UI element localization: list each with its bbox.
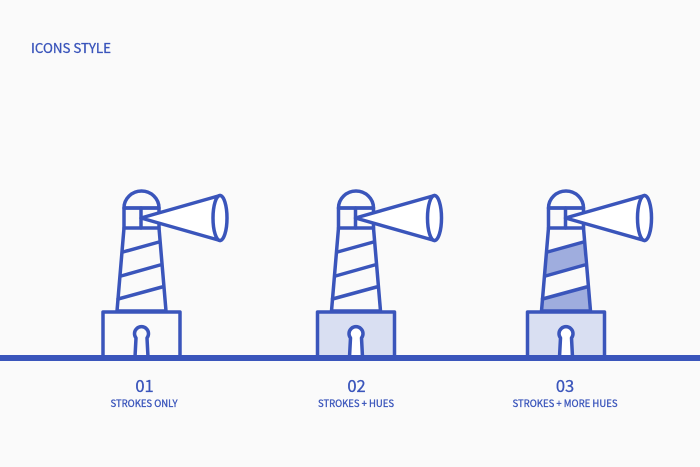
label 01: STROKES ONLY [110, 395, 178, 410]
lighthouse icon 01: strokes only [103, 191, 227, 357]
label 03 [512, 373, 618, 410]
ground line [0, 355, 700, 361]
label 02: 02 [347, 373, 366, 397]
title: ICONS STYLE [31, 37, 111, 57]
label 01: 01 [135, 373, 154, 397]
label 03: 03 [556, 373, 574, 397]
label 02: STROKES + HUES [318, 395, 394, 410]
label 02 [318, 373, 394, 410]
label 03: STROKES + MORE HUES [512, 395, 618, 410]
lighthouse icon 03: strokes and more hues [528, 191, 652, 357]
lighthouse icon 02: strokes and hues [318, 191, 442, 357]
label 01 [110, 373, 178, 410]
